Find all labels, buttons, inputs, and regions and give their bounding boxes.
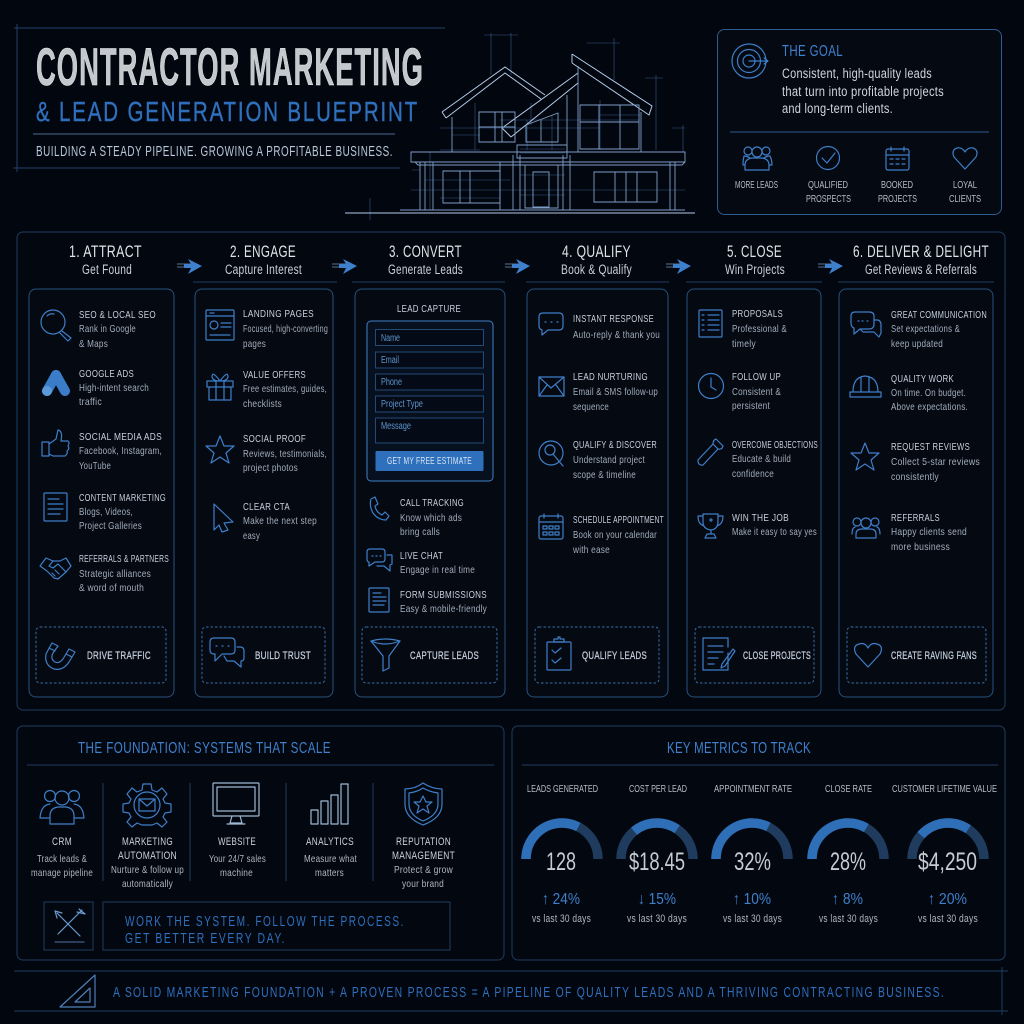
item: value offers <box>207 369 327 410</box>
icon: set square <box>60 975 95 1007</box>
metric: customer lifetime value: vs last 30 days <box>918 913 978 925</box>
input: project type: Project Type <box>381 399 423 410</box>
item: qualify and discover <box>539 439 657 481</box>
item: clear cta: CLEAR CTA <box>243 501 290 513</box>
item: referrals: more business <box>891 541 950 553</box>
item: social media ads: Facebook, Instagram, <box>79 445 162 457</box>
metric: close rate <box>812 783 884 925</box>
system: website: Your 24/7 sales <box>209 853 266 865</box>
item: schedule appointment <box>539 514 664 556</box>
icon: target <box>732 44 768 78</box>
panel: key metrics <box>512 726 1005 960</box>
system: analytics <box>304 784 357 879</box>
callout: qualify leads: QUALIFY LEADS <box>582 650 647 662</box>
goal: qualified prospects: QUALIFIED <box>808 179 848 191</box>
metric: appointment rate: 32% <box>734 848 771 876</box>
heading: deliver and delight: Get Reviews & Referrals <box>865 262 977 277</box>
metric: close rate: 28% <box>830 848 866 876</box>
heading: attract: Get Found <box>82 262 132 277</box>
item: proposals: Professional & <box>732 323 787 335</box>
callout: build trust <box>202 627 325 683</box>
item: live chat: LIVE CHAT <box>400 550 443 562</box>
item: qualify and discover: scope & timeline <box>573 469 636 481</box>
item: follow up: persistent <box>732 400 770 412</box>
item: request reviews: Collect 5-star reviews <box>891 456 980 468</box>
panel: six-step process <box>17 232 1005 710</box>
item: content marketing: Blogs, Videos, <box>79 506 133 518</box>
metric: appointment rate: APPOINTMENT RATE <box>714 783 792 795</box>
goal: booked projects: PROJECTS <box>878 193 917 205</box>
subtitle: & LEAD GENERATION BLUEPRINT <box>36 96 419 127</box>
metric: appointment rate: ↑ 10% <box>733 891 771 908</box>
foundation heading: THE FOUNDATION: SYSTEMS THAT SCALE <box>78 740 331 757</box>
metric: leads generated: LEADS GENERATED <box>527 783 598 795</box>
system: marketing automation: automatically <box>122 878 173 890</box>
system: analytics: matters <box>315 867 344 879</box>
goal heading: THE GOAL <box>782 43 843 60</box>
input: email <box>376 352 484 368</box>
heading: engage <box>193 243 337 282</box>
metric: close rate: CLOSE RATE <box>825 783 872 795</box>
metric: cost per lead: $18.45 <box>629 848 685 876</box>
item: referrals: Happy clients send <box>891 526 967 538</box>
metric: leads generated: 128 <box>546 848 576 876</box>
arrow 1 to 2 <box>177 259 202 274</box>
item: proposals: timely <box>732 338 756 350</box>
goal: booked projects: BOOKED <box>881 179 913 191</box>
heading: convert <box>352 243 505 282</box>
item: content marketing: Project Galleries <box>79 520 142 532</box>
system: crm: manage pipeline <box>31 867 93 879</box>
system: marketing automation: MARKETING <box>122 836 173 848</box>
heading: convert: 3. CONVERT <box>389 243 462 261</box>
goal: booked projects <box>878 147 917 205</box>
goal text: and long-term clients. <box>782 101 893 116</box>
slogan box: WORK THE SYSTEM. FOLLOW THE PROCESS. <box>125 914 405 930</box>
item: referrals and partners: Strategic alliances <box>79 568 151 580</box>
item: google ads: High-intent search <box>79 382 149 394</box>
item: content marketing <box>44 492 166 532</box>
item: referrals and partners: & word of mouth <box>79 582 144 594</box>
goal: qualified prospects: PROSPECTS <box>806 193 851 205</box>
metric: leads generated: vs last 30 days <box>532 913 591 925</box>
item: social media ads <box>42 430 162 472</box>
system: reputation management: REPUTATION <box>396 836 451 848</box>
system: reputation management <box>392 783 455 890</box>
slogan box: GET BETTER EVERY DAY. <box>125 931 286 947</box>
input: message <box>376 418 484 443</box>
goal text: that turn into profitable projects <box>782 84 944 99</box>
item: win the job: Make it easy to say yes <box>732 526 817 538</box>
arrow 3 to 4 <box>505 259 530 274</box>
item: referrals and partners: REFERRALS & PARTNERS <box>79 553 169 565</box>
input: message: Message <box>381 421 411 432</box>
item: request reviews: REQUEST REVIEWS <box>891 441 970 453</box>
item: overcome objections: OVERCOME OBJECTIONS <box>732 439 818 451</box>
goal: more leads <box>735 147 778 191</box>
item: social media ads: YouTube <box>79 460 111 472</box>
heading: attract <box>69 243 142 277</box>
item: clear cta: easy <box>243 530 260 542</box>
heading: close: Win Projects <box>725 262 785 277</box>
arrow 4 to 5 <box>666 259 691 274</box>
callout: build trust: BUILD TRUST <box>255 650 311 662</box>
metric: appointment rate <box>714 783 792 925</box>
item: lead nurturing: Email & SMS follow-up <box>573 386 658 398</box>
system: marketing automation: Nurture & follow up <box>111 864 184 876</box>
item: call tracking <box>370 497 464 538</box>
input: name <box>376 330 484 346</box>
item: content marketing: CONTENT MARKETING <box>79 492 166 504</box>
goal text: Consistent, high-quality leads <box>782 66 932 81</box>
column 4: qualify <box>526 243 669 697</box>
item: social proof: Reviews, testimonials, <box>243 448 327 460</box>
arrow 2 to 3 <box>332 259 357 274</box>
item: value offers: checklists <box>243 398 282 410</box>
callout: create raving fans: CREATE RAVING FANS <box>891 650 977 662</box>
item: overcome objections <box>698 439 818 480</box>
item: instant response <box>539 313 660 341</box>
item: qualify and discover: QUALIFY & DISCOVER <box>573 439 657 451</box>
item: quality work <box>850 373 968 413</box>
item: google ads: GOOGLE ADS <box>79 368 134 380</box>
column 1: attract <box>29 243 174 697</box>
item: win the job: WIN THE JOB <box>732 512 789 524</box>
goal: loyal clients: LOYAL <box>953 179 977 191</box>
panel: the goal <box>718 30 1002 214</box>
item: proposals: PROPOSALS <box>732 308 783 320</box>
item: landing pages: pages <box>243 338 266 350</box>
item: social proof <box>206 433 327 474</box>
goal: more leads: MORE LEADS <box>735 179 778 191</box>
item: follow up <box>698 371 781 412</box>
title: CONTRACTOR MARKETING <box>36 38 424 97</box>
item: landing pages: LANDING PAGES <box>243 308 314 320</box>
metric: customer lifetime value <box>892 783 997 925</box>
goal: loyal clients <box>949 148 981 205</box>
system: crm: Track leads & <box>37 853 87 865</box>
metric: leads generated: ↑ 24% <box>542 891 580 908</box>
item: social media ads: SOCIAL MEDIA ADS <box>79 431 162 443</box>
metric: customer lifetime value: ↑ 20% <box>928 891 967 908</box>
button: get my free estimate: GET MY FREE ESTIMATE <box>387 455 472 467</box>
item: live chat <box>367 549 475 576</box>
callout: qualify leads <box>535 627 659 683</box>
system: crm: CRM <box>52 836 72 848</box>
item: seo: & Maps <box>79 338 108 350</box>
heading: engage: 2. ENGAGE <box>230 243 296 261</box>
item: value offers: VALUE OFFERS <box>243 369 306 381</box>
system: marketing automation: AUTOMATION <box>118 850 177 862</box>
item: form submissions: FORM SUBMISSIONS <box>400 589 487 601</box>
metric: close rate: vs last 30 days <box>819 913 878 925</box>
item: schedule appointment: SCHEDULE APPOINTMENT <box>573 514 664 526</box>
metric: cost per lead <box>621 783 693 925</box>
item: quality work: On time. On budget. <box>891 387 966 399</box>
goal text <box>782 66 944 116</box>
column 3: convert <box>352 243 505 697</box>
panel: the foundation <box>17 726 504 960</box>
item: lead nurturing <box>539 371 658 413</box>
system: reputation management: Protect & grow <box>394 864 453 876</box>
item: referrals: REFERRALS <box>891 512 940 524</box>
item: quality work: QUALITY WORK <box>891 373 954 385</box>
item: value offers: Free estimates, guides, <box>243 383 327 395</box>
item: google ads: traffic <box>79 396 102 408</box>
system: website: machine <box>220 867 253 879</box>
item: seo <box>41 309 156 350</box>
lead capture form <box>367 321 493 481</box>
slogan box <box>103 902 450 950</box>
item: referrals <box>852 512 967 553</box>
goal: qualified prospects <box>806 146 851 205</box>
item: quality work: Above expectations. <box>891 401 968 413</box>
item: seo: SEO & LOCAL SEO <box>79 309 156 321</box>
item: overcome objections: confidence <box>732 468 774 480</box>
metric: leads generated <box>526 783 598 925</box>
input: email: Email <box>381 355 399 366</box>
item: google ads <box>42 368 149 408</box>
metrics heading: KEY METRICS TO TRACK <box>667 740 811 757</box>
item: overcome objections: Educate & build <box>732 453 791 465</box>
item: clear cta <box>214 501 317 542</box>
item: seo: Rank in Google <box>79 323 136 335</box>
system: analytics: ANALYTICS <box>306 836 354 848</box>
column 5: close <box>686 243 822 697</box>
heading: qualify: 4. QUALIFY <box>562 243 631 261</box>
metric: appointment rate: vs last 30 days <box>723 913 782 925</box>
heading: engage: Capture Interest <box>225 262 302 277</box>
metric: cost per lead: COST PER LEAD <box>629 783 687 795</box>
callout: drive traffic <box>36 627 166 683</box>
item: win the job <box>698 512 817 538</box>
callout: drive traffic: DRIVE TRAFFIC <box>87 650 151 662</box>
heading: attract: 1. ATTRACT <box>69 243 142 261</box>
arrow 5 to 6 <box>818 259 843 274</box>
heading: deliver and delight <box>838 243 994 282</box>
callout: capture leads: CAPTURE LEADS <box>410 650 479 662</box>
header title block <box>13 24 445 172</box>
callout: close projects <box>695 627 814 683</box>
heading: convert: Generate Leads <box>388 262 463 277</box>
item: social proof: project photos <box>243 462 298 474</box>
column 6: deliver and delight <box>838 243 994 697</box>
item: clear cta: Make the next step <box>243 515 317 527</box>
item: great communication: keep updated <box>891 338 943 350</box>
input: phone: Phone <box>381 377 402 388</box>
system: website: WEBSITE <box>218 836 256 848</box>
item: call tracking: bring calls <box>400 526 440 538</box>
button: get my free estimate <box>376 451 484 471</box>
metric: close rate: ↑ 8% <box>832 891 863 908</box>
metric: customer lifetime value: $4,250 <box>918 848 977 876</box>
heading: close: 5. CLOSE <box>727 243 782 261</box>
heading: close <box>686 243 822 282</box>
item: lead nurturing: sequence <box>573 401 609 413</box>
heading: qualify <box>526 243 669 282</box>
input: project type <box>376 396 484 412</box>
item: live chat: Engage in real time <box>400 564 475 576</box>
item: landing pages <box>206 308 328 350</box>
item: request reviews <box>851 441 980 483</box>
system: website <box>209 783 266 879</box>
item: qualify and discover: Understand project <box>573 454 645 466</box>
system: crm <box>31 790 93 879</box>
heading: qualify: Book & Qualify <box>561 262 632 277</box>
item: call tracking: CALL TRACKING <box>400 497 464 509</box>
item: form submissions <box>369 588 487 615</box>
item: instant response: INSTANT RESPONSE <box>573 313 654 325</box>
item: follow up: FOLLOW UP <box>732 371 781 383</box>
icon: crossed tools <box>44 902 93 950</box>
form heading: LEAD CAPTURE <box>397 303 461 315</box>
item: great communication: Set expectations & <box>891 323 960 335</box>
tagline: BUILDING A STEADY PIPELINE. GROWING A PROFITABLE BUSINESS. <box>36 143 393 160</box>
item: form submissions: Easy & mobile-friendly <box>400 603 487 615</box>
system: analytics: Measure what <box>304 853 357 865</box>
system: reputation management: your brand <box>402 878 444 890</box>
item: landing pages: Focused, high-converting <box>243 323 328 335</box>
item: social proof: SOCIAL PROOF <box>243 433 306 445</box>
item: lead nurturing: LEAD NURTURING <box>573 371 648 383</box>
goal: loyal clients: CLIENTS <box>949 193 981 205</box>
system: reputation management: MANAGEMENT <box>392 850 455 862</box>
item: referrals and partners <box>40 553 169 594</box>
house blueprint illustration <box>345 33 695 220</box>
item: call tracking: Know which ads <box>400 512 462 524</box>
callout: close projects: CLOSE PROJECTS <box>743 650 811 662</box>
item: instant response: Auto-reply & thank you <box>573 329 660 341</box>
item: schedule appointment: Book on your calendar <box>573 529 657 541</box>
input: phone <box>376 374 484 390</box>
column 2: engage <box>193 243 337 697</box>
item: follow up: Consistent & <box>732 386 781 398</box>
item: proposals <box>699 308 787 350</box>
item: great communication <box>851 309 987 350</box>
item: schedule appointment: with ease <box>572 544 610 556</box>
metric: cost per lead: vs last 30 days <box>627 913 687 925</box>
callout: capture leads <box>362 627 497 683</box>
item: request reviews: consistently <box>891 471 939 483</box>
system: marketing automation <box>111 784 184 890</box>
input: name: Name <box>381 333 400 344</box>
item: great communication: GREAT COMMUNICATION <box>891 309 987 321</box>
metric: cost per lead: ↓ 15% <box>638 891 676 908</box>
footer banner <box>14 967 1008 1015</box>
callout: create raving fans <box>847 627 986 683</box>
